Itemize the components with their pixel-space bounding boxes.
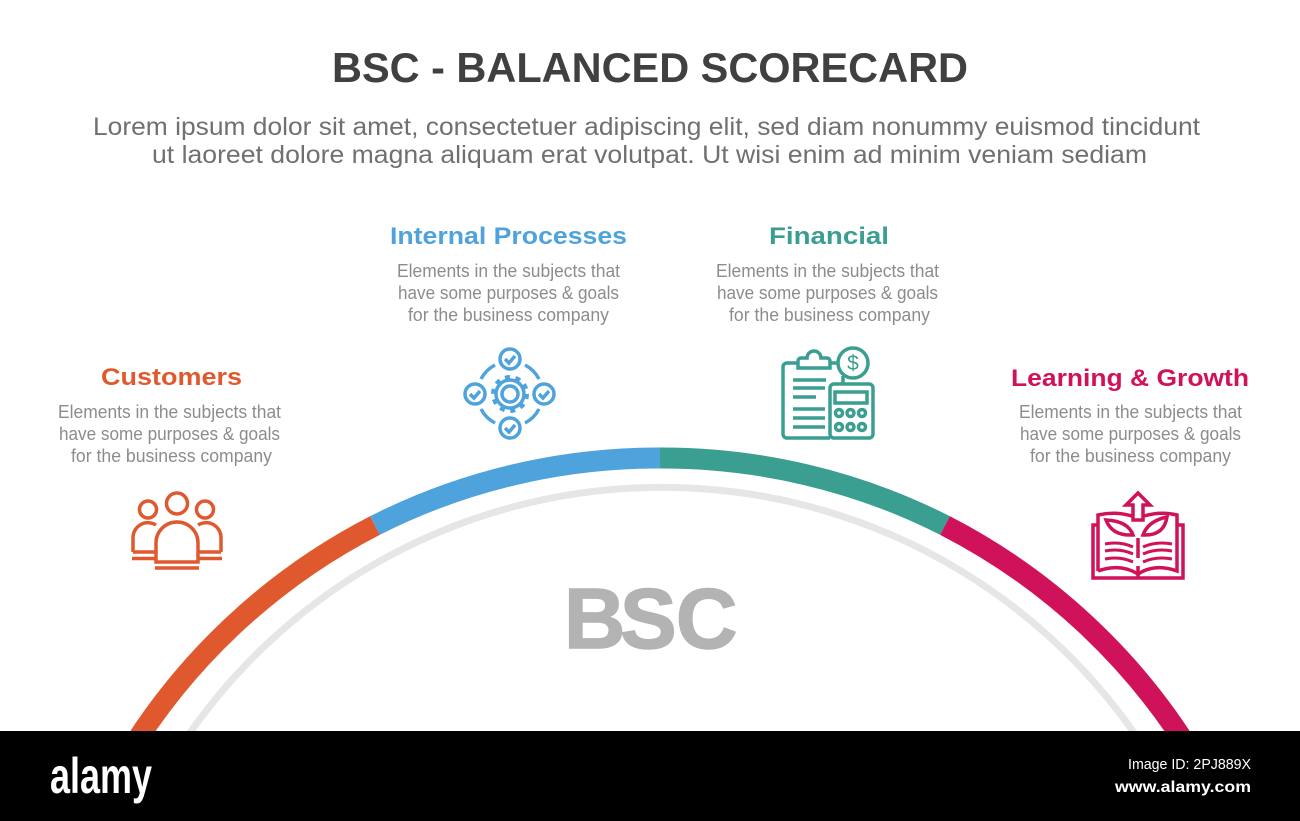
- subtitle: [93, 113, 1200, 169]
- description: internal processes: Elements in the subjects that: [397, 261, 620, 281]
- image id: Image ID: 2PJ889X: [1128, 756, 1251, 773]
- description: internal processes: [397, 261, 620, 325]
- heading: customers: Customers: [101, 364, 242, 391]
- subtitle: ut laoreet dolore magna aliquam erat volutpat. Ut wisi enim ad minim veniam sediam: [152, 141, 1147, 169]
- segment: internal processes: [375, 458, 660, 526]
- icon: open book with plant and arrow: [1093, 493, 1183, 578]
- icon: clipboard and calculator: $: [847, 352, 859, 375]
- description: customers: for the business company: [71, 446, 272, 466]
- description: financial: Elements in the subjects that: [716, 261, 939, 281]
- description: learning and growth: Elements in the subjects that: [1019, 402, 1242, 422]
- segment: learning and growth: [945, 526, 1196, 760]
- semicircle arc segments: [124, 458, 1196, 760]
- segment: customers: [124, 526, 375, 760]
- icon: gear with checks: [465, 349, 554, 438]
- description: learning and growth: have some purposes & goals: [1020, 424, 1241, 444]
- description: learning and growth: for the business company: [1030, 446, 1231, 466]
- heading: internal processes: Internal Processes: [390, 223, 627, 250]
- panel: internal processes: [390, 223, 627, 438]
- description: internal processes: have some purposes & goals: [398, 283, 619, 303]
- title: BSC - BALANCED SCORECARD: [332, 44, 968, 91]
- description: financial: have some purposes & goals: [717, 283, 938, 303]
- heading: learning and growth: Learning & Growth: [1011, 365, 1249, 392]
- icon: people: [132, 493, 222, 568]
- heading: financial: Financial: [769, 223, 889, 250]
- description: customers: have some purposes & goals: [59, 424, 280, 444]
- description: customers: [58, 402, 281, 466]
- footer bar: [0, 731, 1300, 821]
- description: financial: [716, 261, 939, 325]
- panel: financial: [716, 223, 939, 438]
- icon: clipboard and calculator: [783, 348, 873, 438]
- description: internal processes: for the business company: [408, 305, 609, 325]
- description: learning and growth: [1019, 402, 1242, 466]
- center label BSC: BSC: [564, 572, 737, 667]
- panel: learning and growth: [1011, 365, 1249, 578]
- gray inner arc: [172, 487, 1152, 760]
- website: www.alamy.com: [1114, 779, 1251, 796]
- description: financial: for the business company: [729, 305, 930, 325]
- subtitle: Lorem ipsum dolor sit amet, consectetuer adipiscing elit, sed diam nonummy euismod tincidunt: [93, 113, 1200, 141]
- alamy logo: alamy: [50, 748, 152, 804]
- segment: financial: [660, 458, 945, 526]
- panel: customers: [58, 364, 281, 568]
- description: customers: Elements in the subjects that: [58, 402, 281, 422]
